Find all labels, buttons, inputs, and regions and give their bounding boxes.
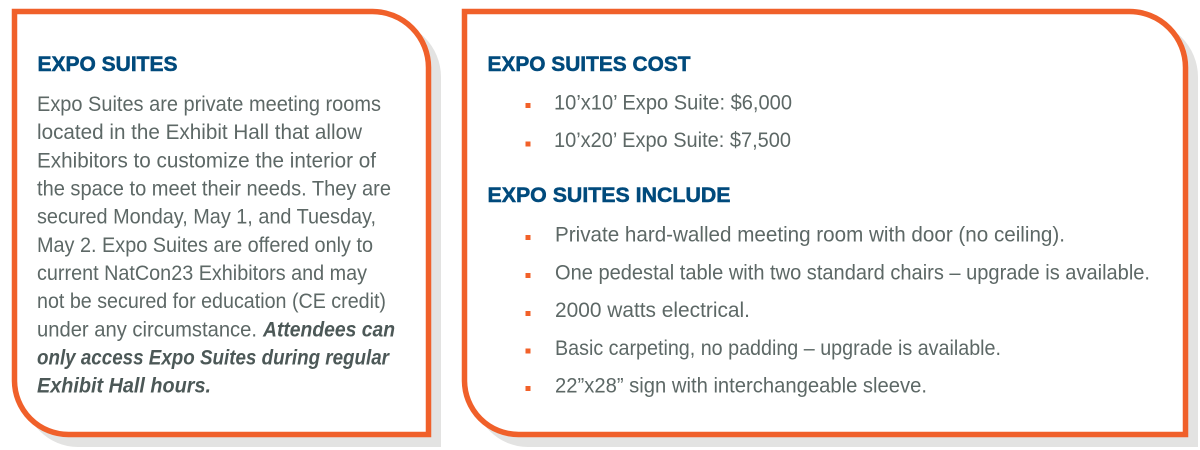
description text: located in the Exhibit Hall that allow [37, 121, 363, 144]
heading: include: EXPO SUITES INCLUDE [488, 184, 730, 207]
description text: the space to meet their needs. They are [37, 178, 391, 200]
description text: current NatCon23 Exhibitors and may [37, 262, 367, 285]
description text: Exhibit Hall hours. [37, 374, 211, 398]
panel: cost and inclusions [464, 12, 1198, 447]
heading: cost: EXPO SUITES COST [488, 53, 691, 76]
panel: expo suites description [14, 12, 441, 447]
panel frame right [464, 12, 1186, 434]
cost list: 10’x20’ Expo Suite: $7,500 [554, 129, 791, 152]
panel frame left [14, 12, 428, 434]
inclusions list: 2000 watts electrical. [555, 299, 750, 322]
description text: Exhibitors to customize the interior of [37, 150, 376, 172]
inclusions list: 22”x28” sign with interchangeable sleeve. [555, 374, 927, 398]
cost list [526, 92, 792, 152]
description text [37, 93, 395, 398]
heading: expo suites: EXPO SUITES [38, 53, 178, 76]
description text: under any circumstance. [37, 318, 257, 342]
description text: secured Monday, May 1, and Tuesday, [37, 206, 376, 228]
inclusions list: One pedestal table with two standard chairs – upgrade is available. [555, 262, 1150, 284]
inclusions list: Basic carpeting, no padding – upgrade is available. [555, 337, 1001, 360]
description text: May 2. Expo Suites are offered only to [37, 234, 373, 257]
panel shadow right [474, 21, 1198, 447]
cost list: 10’x10’ Expo Suite: $6,000 [554, 92, 792, 114]
inclusions list: Private hard-walled meeting room with door (no ceiling). [555, 224, 1065, 246]
inclusions list [526, 224, 1150, 398]
description text: Expo Suites are private meeting rooms [37, 93, 381, 116]
description text: only access Expo Suites during regular [37, 346, 391, 370]
description text: Attendees can [262, 318, 395, 342]
panel shadow left [24, 21, 441, 447]
description text: not be secured for education (CE credit) [37, 290, 386, 313]
